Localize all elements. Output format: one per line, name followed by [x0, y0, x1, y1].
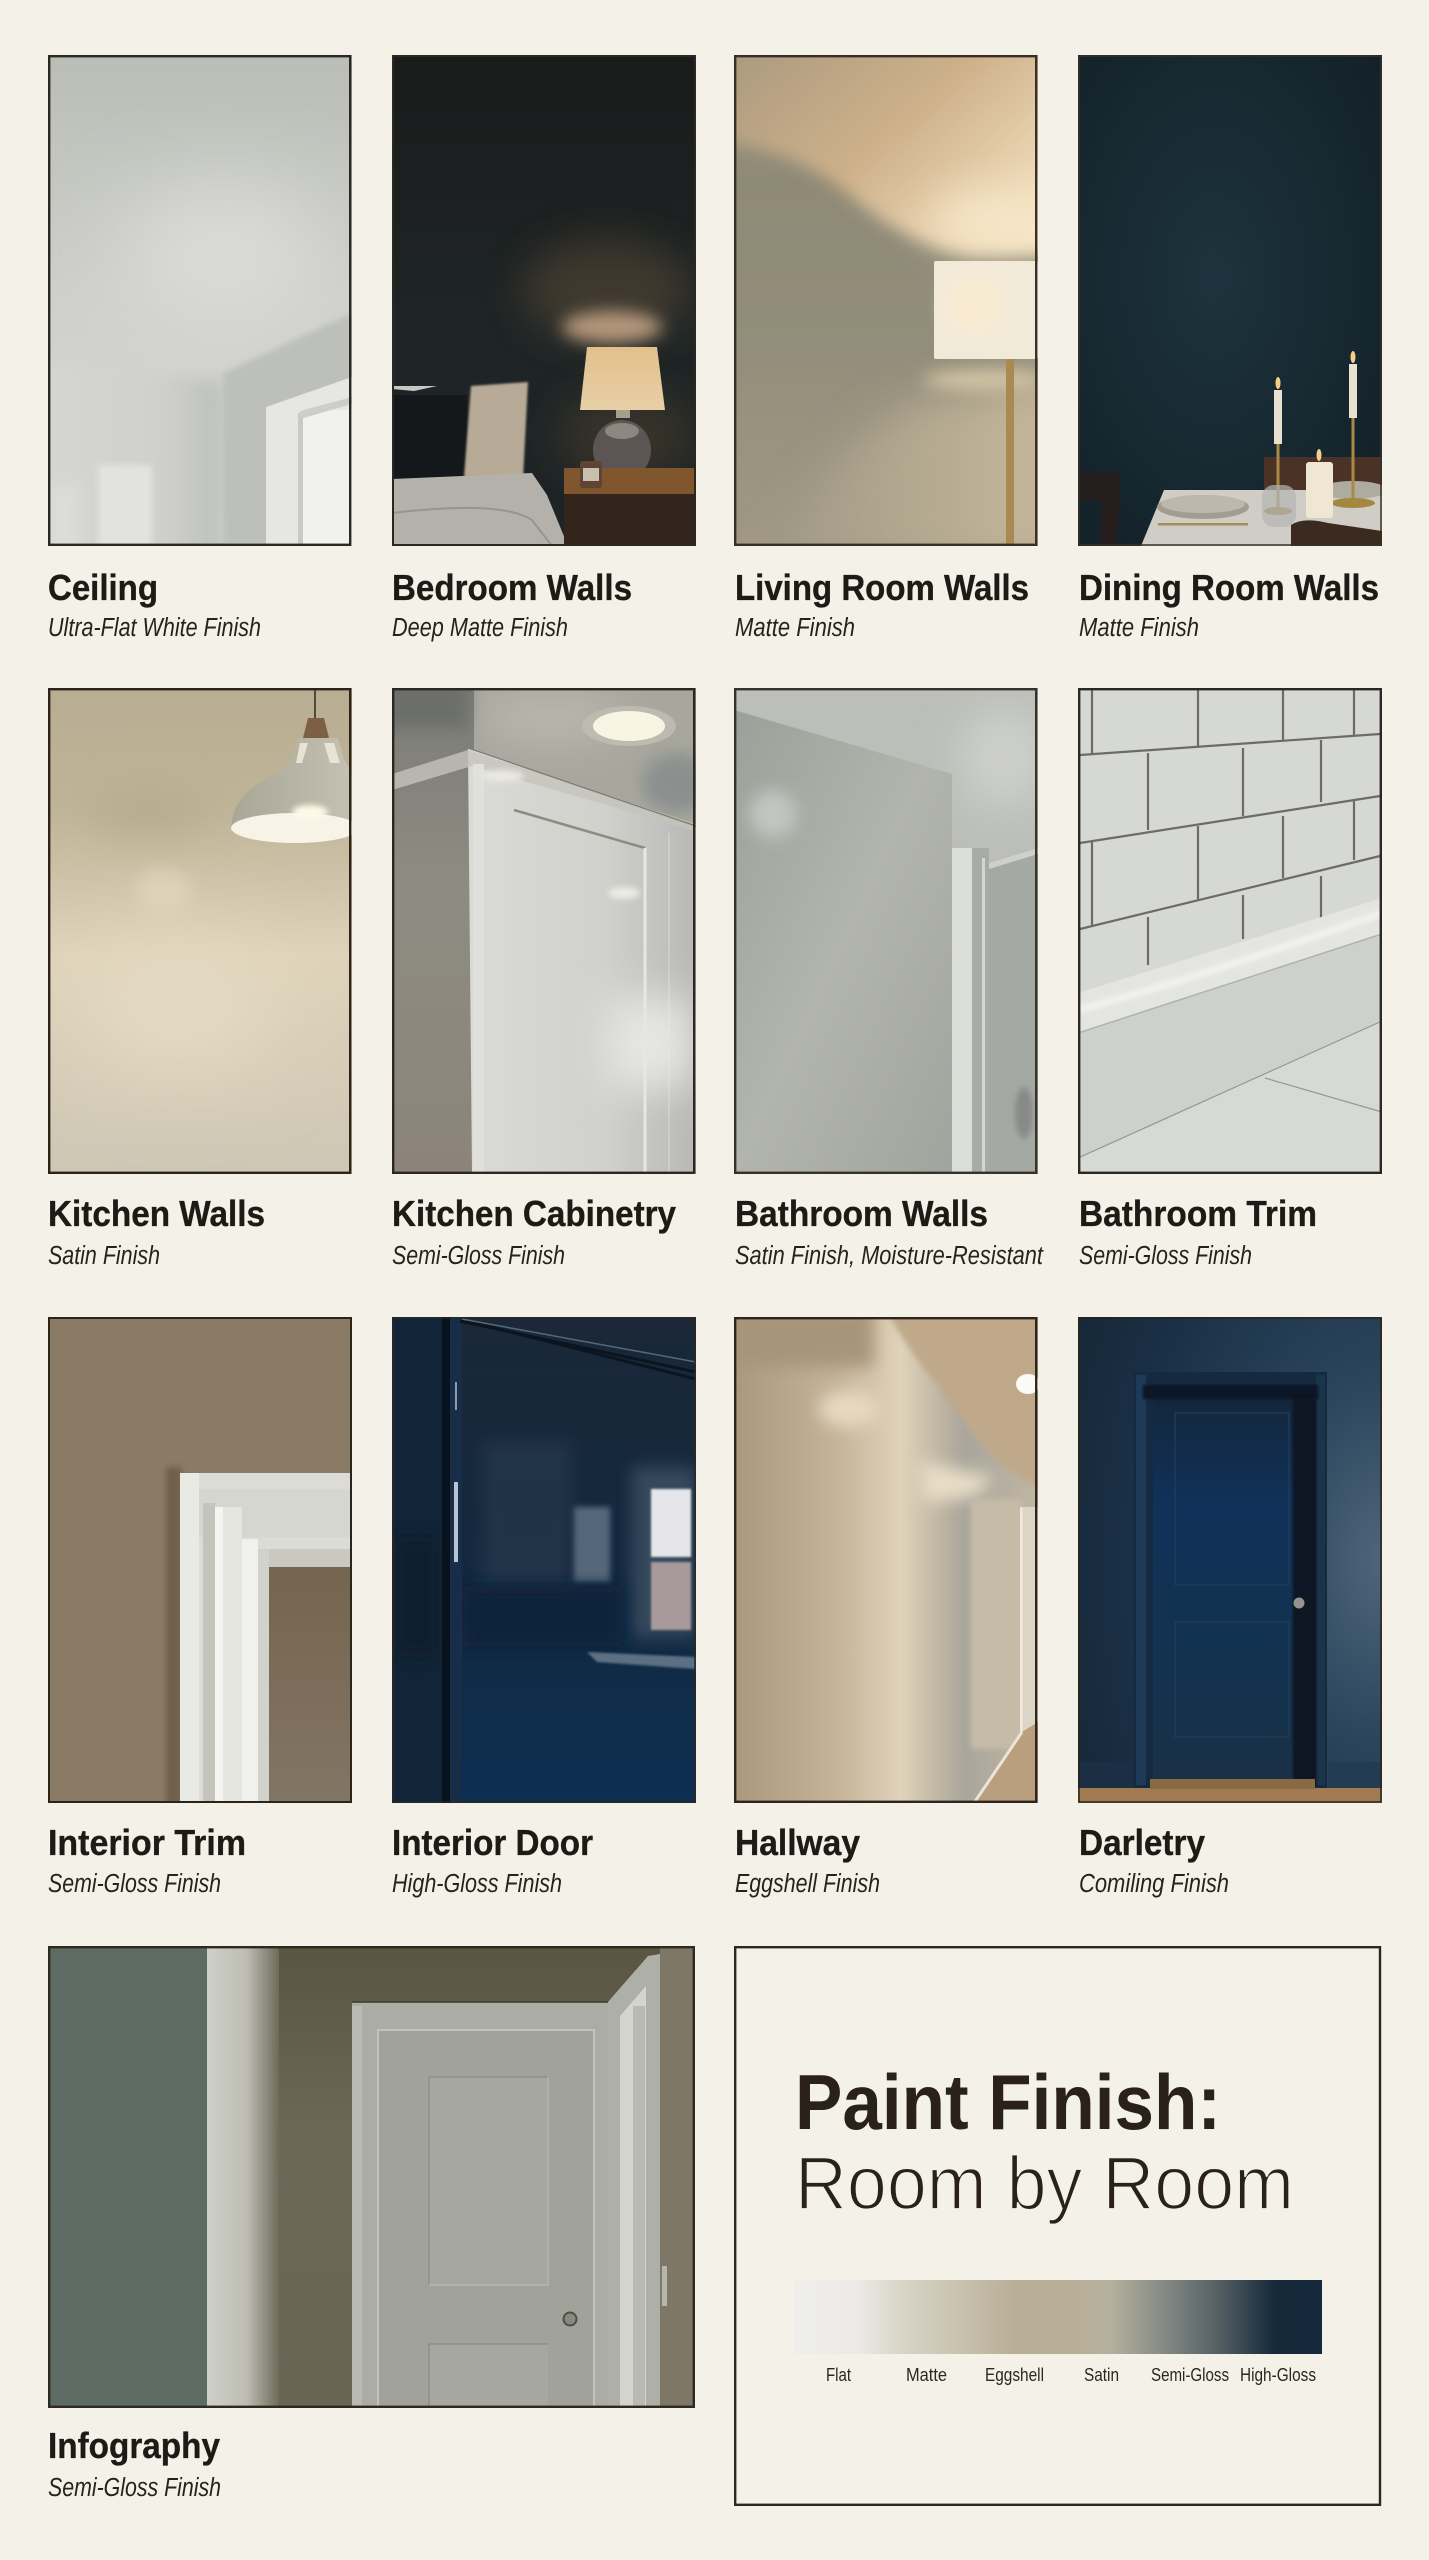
gradient bar: finish scale from flat to high-gloss	[794, 2280, 1322, 2354]
finish: Semi-Gloss Finish: Semi-Gloss Finish	[1079, 1242, 1252, 1270]
card: Dining Room Walls	[1078, 55, 1387, 642]
title: Interior Door: Interior Door	[392, 1822, 593, 1863]
heading: Room by Room: Room by Room	[795, 2141, 1294, 2225]
title: Infography: Infography	[48, 2425, 220, 2466]
scale labels	[826, 2364, 1316, 2385]
title: Hallway: Hallway	[735, 1822, 860, 1863]
title: Kitchen Cabinetry: Kitchen Cabinetry	[392, 1193, 676, 1234]
card: Darletry	[1078, 1317, 1382, 1898]
finish: Matte Finish: Matte Finish	[1079, 614, 1199, 642]
photo: dark teal wall with candles and table	[1078, 55, 1387, 546]
title: Bedroom Walls: Bedroom Walls	[392, 567, 632, 608]
label: Semi-Gloss: Semi-Gloss	[1151, 2364, 1229, 2385]
card: Kitchen Cabinetry	[392, 688, 696, 1264]
title: Interior Trim: Interior Trim	[48, 1822, 246, 1863]
photo: eggshell hallway wall and ceiling	[724, 1307, 1054, 1803]
label: Matte: Matte	[906, 2364, 947, 2385]
label: Eggshell: Eggshell	[985, 2364, 1044, 2385]
photo: taupe wall with white door casing	[48, 1317, 352, 1807]
card: Interior Trim	[48, 1317, 352, 1898]
card: Bathroom Walls	[734, 688, 1049, 1270]
photo: subway tile with glossy trim	[1078, 688, 1382, 1174]
card: Infography	[48, 1946, 695, 2502]
photo: navy door in navy wall	[1078, 1317, 1382, 1803]
finish: Satin Finish, Moisture-Resistant: Satin Finish, Moisture-Resistant	[735, 1242, 1044, 1270]
label: Flat: Flat	[826, 2364, 851, 2385]
card: Bedroom Walls	[392, 55, 697, 642]
finish: Satin Finish: Satin Finish	[48, 1242, 160, 1270]
title: Living Room Walls: Living Room Walls	[735, 567, 1029, 608]
label: High-Gloss: High-Gloss	[1240, 2364, 1316, 2385]
card: Hallway	[724, 1307, 1054, 1898]
title: Bathroom Trim: Bathroom Trim	[1079, 1193, 1317, 1234]
finish: Ultra-Flat White Finish: Ultra-Flat White Finish	[48, 614, 261, 642]
finish: High-Gloss Finish: High-Gloss Finish	[392, 1870, 562, 1898]
title: Darletry: Darletry	[1079, 1822, 1205, 1863]
card: Living Room Walls	[734, 55, 1038, 636]
photo: high-gloss navy door with window reflection	[392, 1317, 696, 1803]
finish: Deep Matte Finish: Deep Matte Finish	[392, 614, 568, 642]
title: Dining Room Walls: Dining Room Walls	[1079, 567, 1379, 608]
card: Interior Door	[392, 1317, 696, 1898]
photo: glossy white cabinet and recessed light	[382, 678, 712, 1174]
panel frame	[735, 1947, 1380, 2505]
label: Satin: Satin	[1084, 2364, 1119, 2385]
card: Ceiling	[28, 55, 352, 642]
photo: teal wall, olive wall and white door	[48, 1946, 695, 2414]
finish: Comiling Finish: Comiling Finish	[1079, 1870, 1229, 1898]
card: Bathroom Trim	[1078, 688, 1382, 1270]
photo: satin kitchen wall with pendant	[48, 688, 359, 1174]
card: Kitchen Walls	[48, 688, 359, 1270]
photo: warm matte wall with floor lamp	[734, 55, 1038, 546]
panel: title and finish scale	[735, 1947, 1380, 2505]
photo: white ceiling corner with window	[28, 55, 352, 565]
heading: Paint Finish:: Paint Finish:	[795, 2058, 1221, 2146]
title: Bathroom Walls: Bathroom Walls	[735, 1193, 988, 1234]
finish: Eggshell Finish: Eggshell Finish	[735, 1870, 880, 1898]
title: Kitchen Walls: Kitchen Walls	[48, 1193, 265, 1234]
finish: Matte Finish: Matte Finish	[735, 614, 855, 642]
photo: satin bathroom wall and shower door	[734, 688, 1049, 1174]
finish: Semi-Gloss Finish: Semi-Gloss Finish	[48, 2474, 221, 2502]
photo: dark bedroom wall with lamp	[392, 55, 697, 546]
finish: Semi-Gloss Finish: Semi-Gloss Finish	[48, 1870, 221, 1898]
title: Ceiling: Ceiling	[48, 567, 158, 608]
finish: Semi-Gloss Finish: Semi-Gloss Finish	[392, 1242, 565, 1270]
